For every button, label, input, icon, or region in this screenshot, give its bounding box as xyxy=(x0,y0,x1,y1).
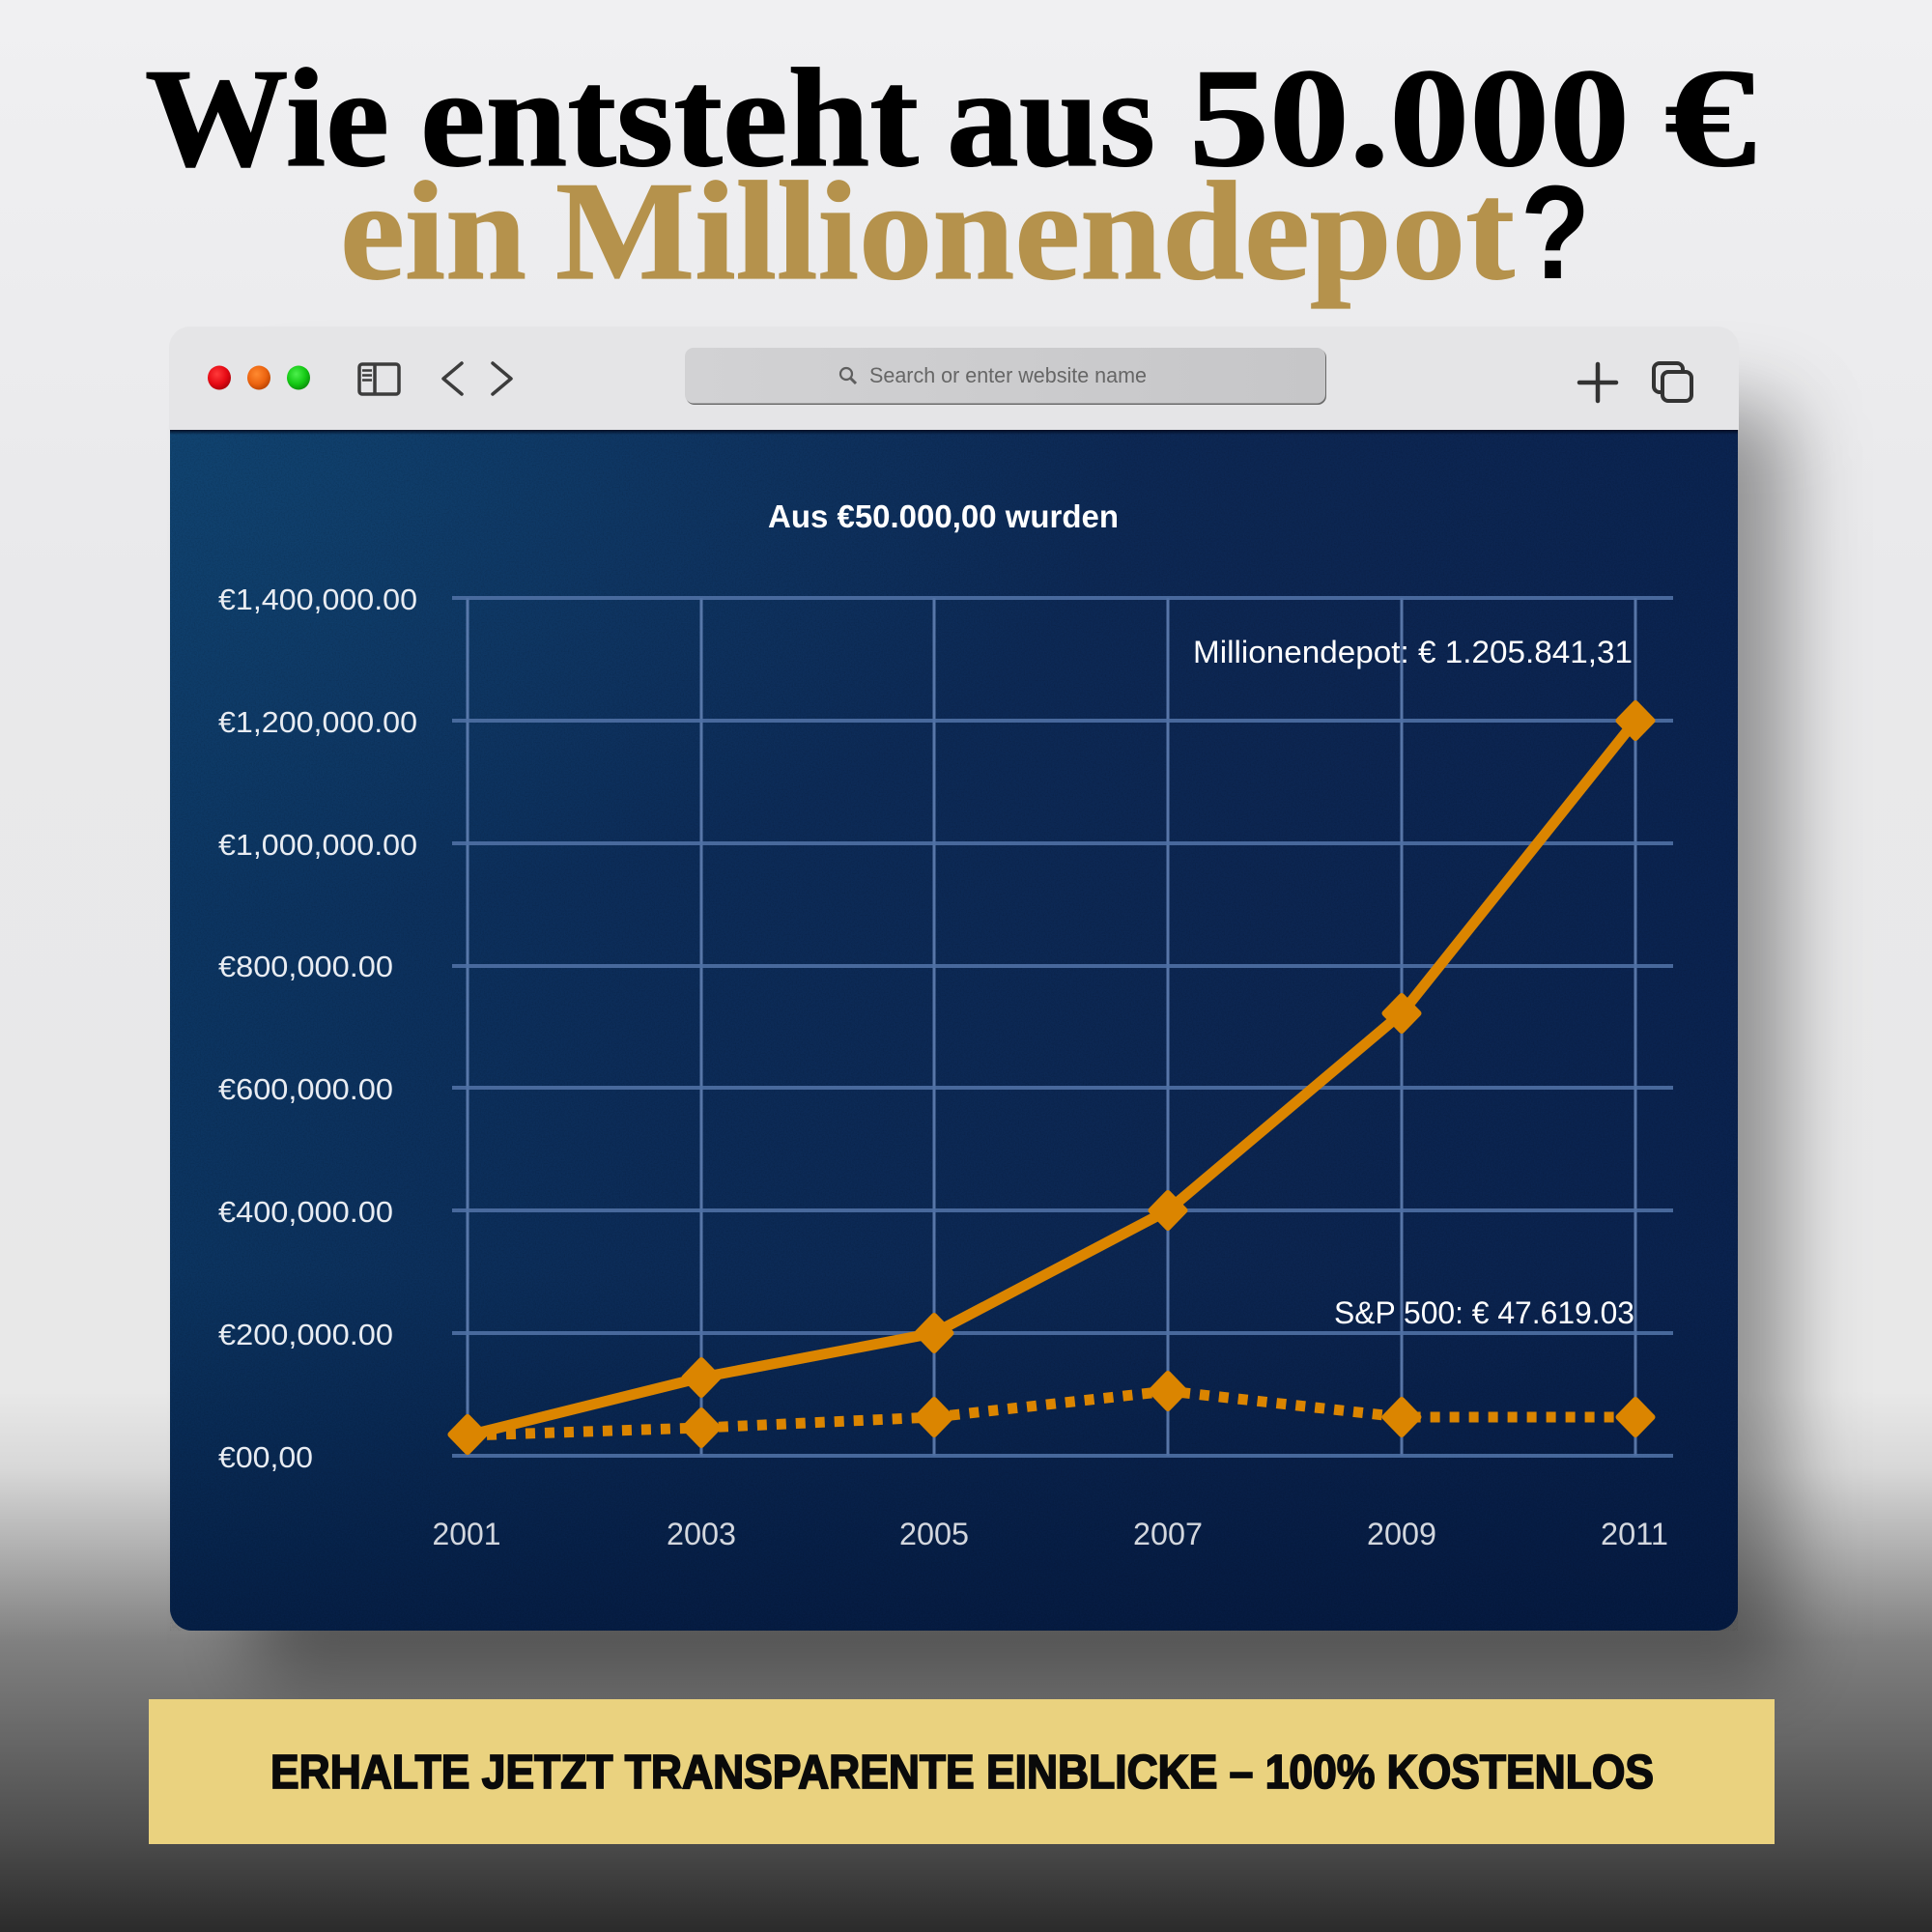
title line 1 xyxy=(145,40,1756,196)
traffic light buttons xyxy=(208,365,310,390)
title xyxy=(145,40,1756,309)
x axis labels: 2003 xyxy=(667,1517,736,1551)
title line 2: Millionendepot xyxy=(555,153,1515,309)
browser title bar xyxy=(169,327,1739,430)
y axis labels: €1,000,000.00 xyxy=(218,828,417,862)
title line 1: aus xyxy=(947,40,1155,196)
y axis labels: €200,000.00 xyxy=(218,1318,393,1351)
x axis labels xyxy=(433,1517,1668,1551)
title line 1: € xyxy=(1664,40,1756,196)
series label: Millionendepot: Millionendepot: € 1.205.841,31 xyxy=(1193,635,1633,669)
title line 2: ? xyxy=(1520,158,1590,307)
y axis labels: €400,000.00 xyxy=(218,1195,393,1229)
icon: forward chevron xyxy=(493,363,511,394)
x axis labels: 2007 xyxy=(1133,1517,1203,1551)
y axis labels: €800,000.00 xyxy=(218,950,393,983)
y axis labels: €1,400,000.00 xyxy=(218,582,417,616)
address bar xyxy=(685,348,1326,405)
x axis labels: 2011 xyxy=(1601,1517,1668,1551)
window drop shadow xyxy=(253,406,1787,1676)
chart title: Aus €50.000,00 wurden xyxy=(768,498,1119,534)
banner text: ERHALTE JETZT TRANSPARENTE EINBLICKE – 100% KOSTENLOS xyxy=(270,1747,1654,1799)
y axis labels: €600,000.00 xyxy=(218,1072,393,1106)
browser window xyxy=(169,327,1739,1631)
y axis labels xyxy=(218,582,417,1474)
line series: S&amp;P 500 (dotted) xyxy=(450,1374,1652,1452)
chart panel xyxy=(170,430,1738,1631)
title line 1: Wie xyxy=(145,40,389,196)
series label: S&amp;P 500: S&P 500: € 47.619.03 xyxy=(1334,1295,1634,1330)
x axis labels: 2001 xyxy=(433,1517,500,1551)
icon: tabs overview xyxy=(1654,363,1691,401)
icon: back chevron xyxy=(443,363,462,394)
title line 2: ein xyxy=(340,153,526,309)
title line 1: entsteht xyxy=(420,40,919,196)
chart grid xyxy=(452,598,1673,1456)
icon: search xyxy=(840,368,856,384)
y axis labels: €00,00 xyxy=(218,1440,313,1474)
call to action banner xyxy=(149,1699,1775,1844)
y axis labels: €1,200,000.00 xyxy=(218,705,417,739)
line series: Millionendepot (solid) xyxy=(450,703,1652,1452)
x axis labels: 2005 xyxy=(899,1517,969,1551)
icon: sidebar xyxy=(359,364,399,394)
title line 1: 50.000 xyxy=(1189,40,1630,196)
x axis labels: 2009 xyxy=(1367,1517,1436,1551)
icon: new tab plus xyxy=(1579,364,1616,401)
address bar placeholder: Search or enter website name xyxy=(869,363,1147,387)
